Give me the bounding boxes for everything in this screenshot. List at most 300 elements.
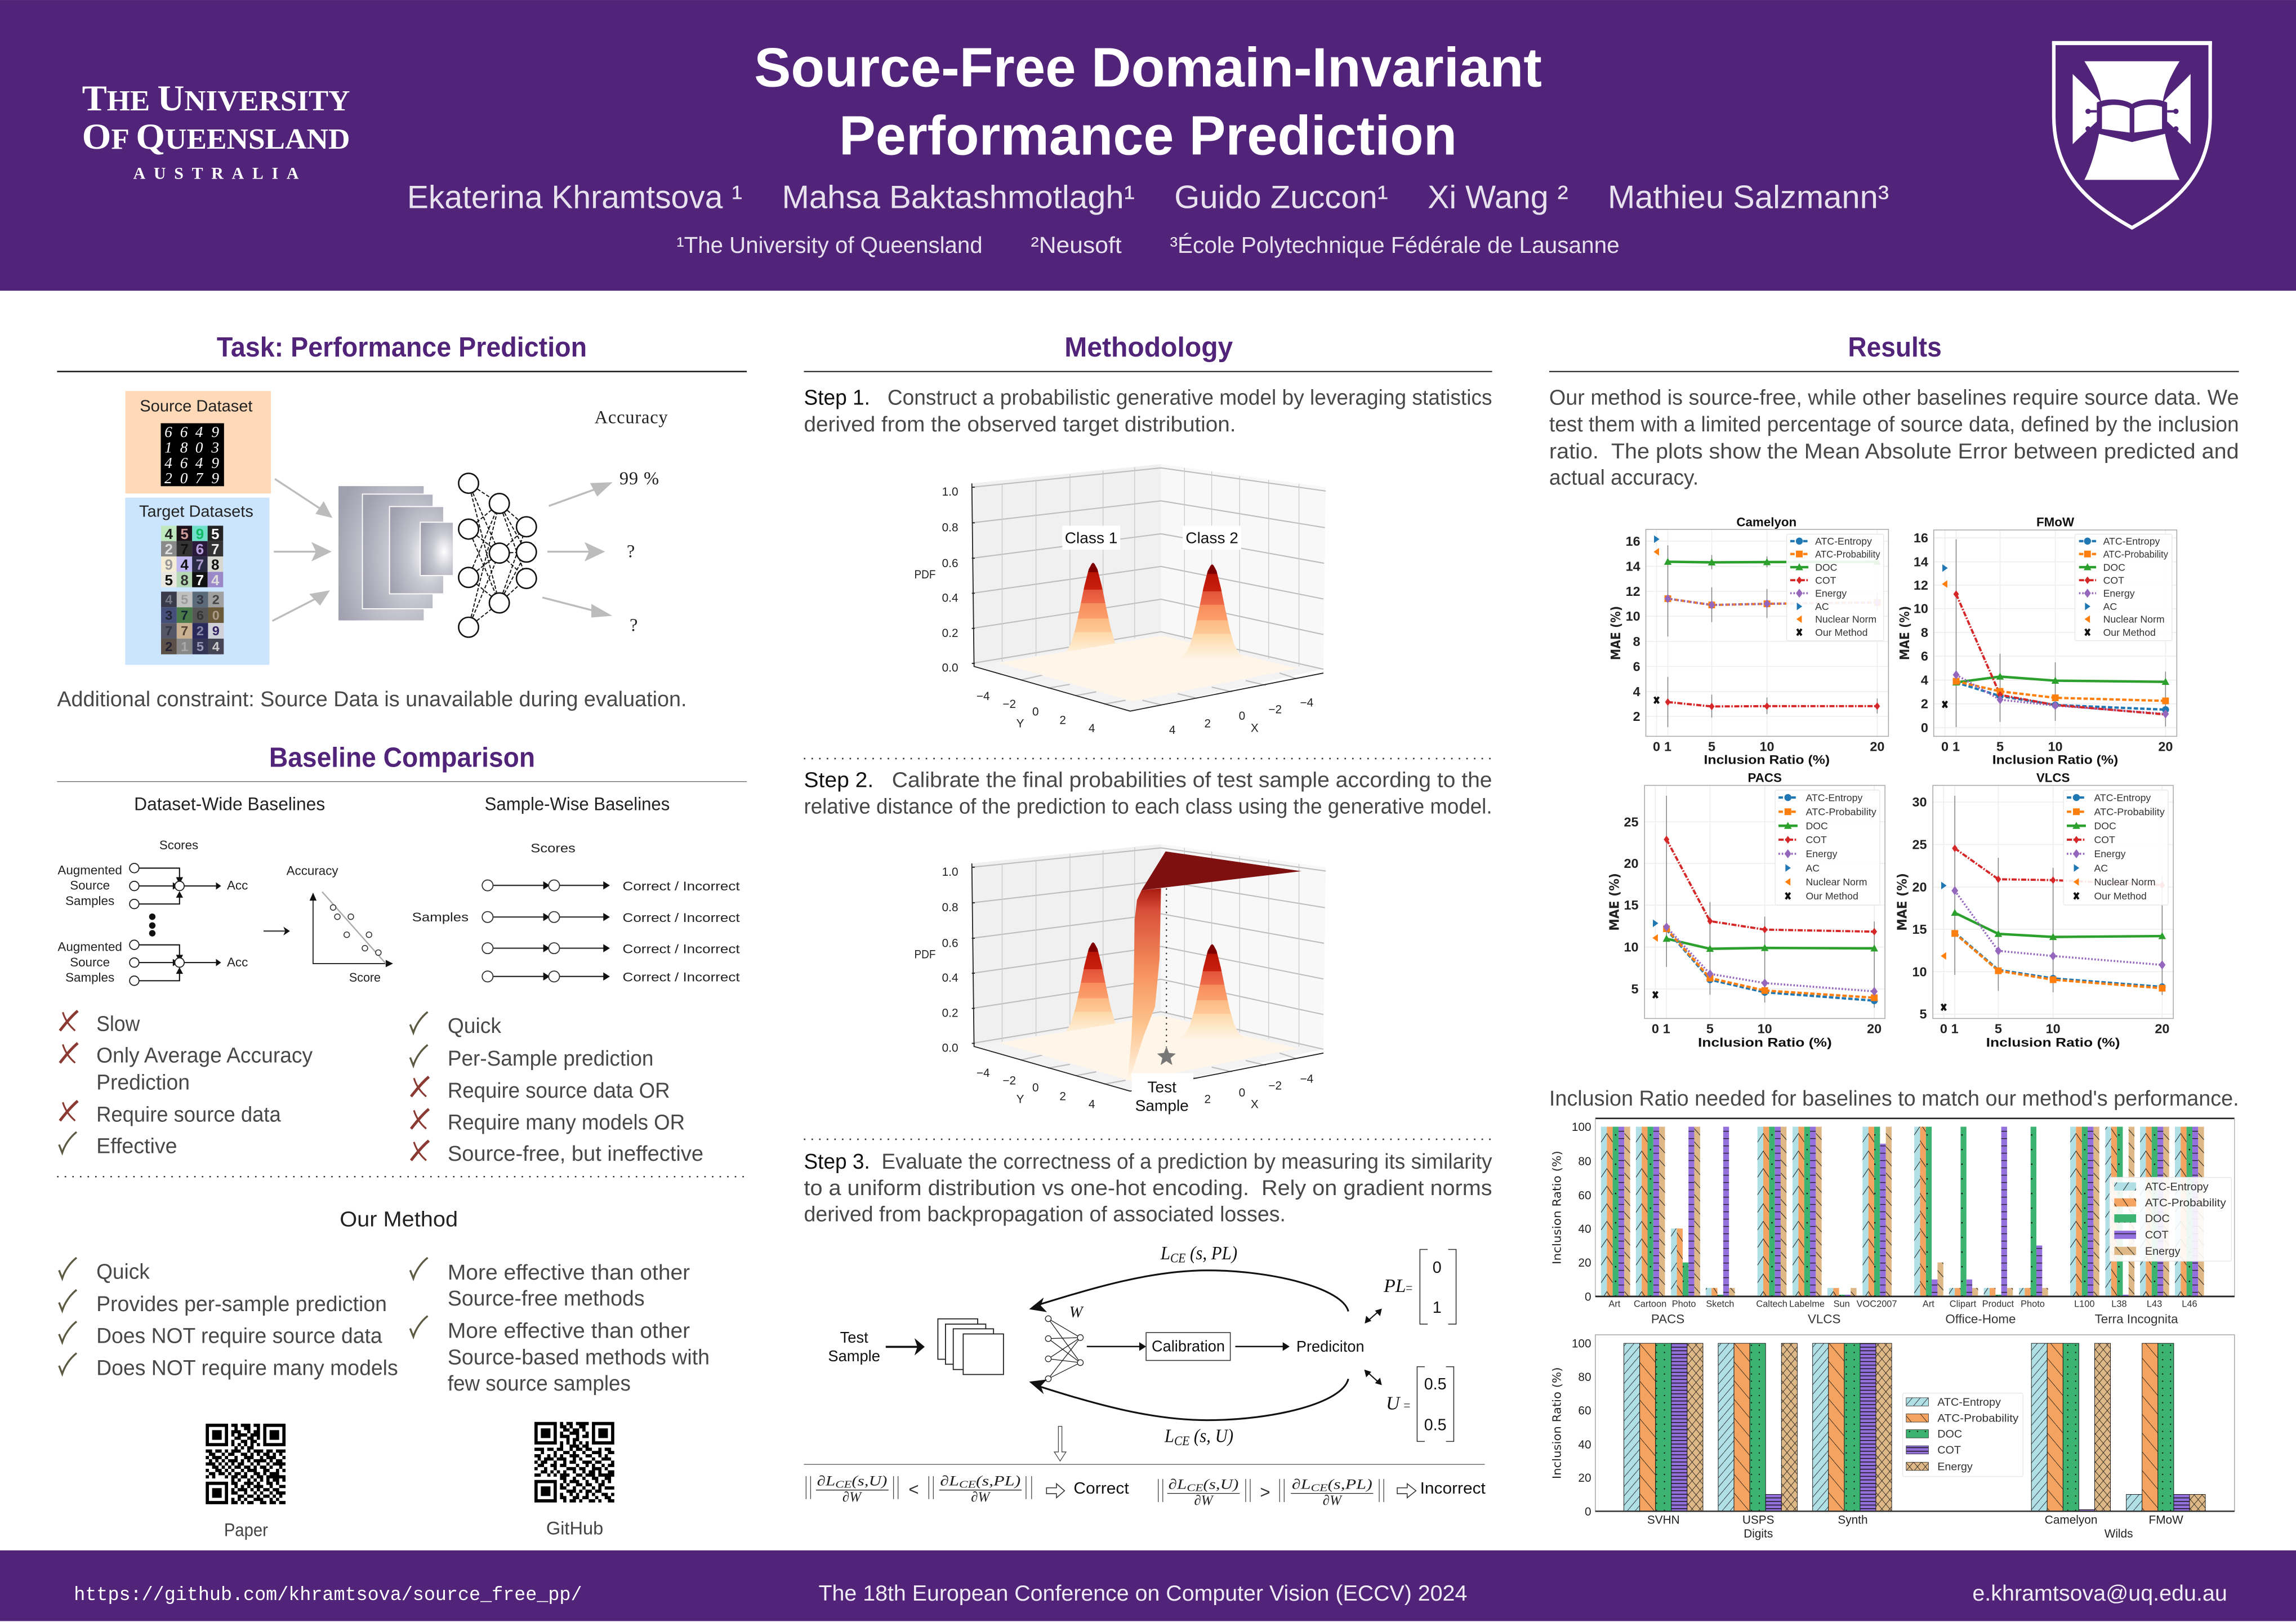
text: results description xyxy=(1549,386,2239,490)
chart: 3D PDF with test sample spike: Test xyxy=(1147,1079,1176,1096)
formula: incorrect condition: (s,PL) xyxy=(1327,1477,1372,1492)
target datasets box: 6 xyxy=(196,541,204,558)
legend: VLCS: COT xyxy=(2094,834,2115,845)
logo: The University of Queensland wordmark: OF QUEENSLAND xyxy=(82,117,350,157)
header band xyxy=(0,0,2296,291)
chart: inclusion ratio bars, domain datasets: Caltech xyxy=(1756,1299,1787,1309)
formula: correct condition: (s,PL) xyxy=(976,1473,1020,1489)
arrows: inputs to network xyxy=(273,479,331,621)
logo: The University of Queensland wordmark xyxy=(82,78,350,182)
formula: correct condition: ∂W xyxy=(842,1490,862,1505)
source dataset box: 4 xyxy=(164,454,172,471)
formula: incorrect condition: ∂L xyxy=(1169,1477,1183,1492)
diagram: calibration pipeline: 1 xyxy=(1433,1299,1442,1317)
neural network xyxy=(458,473,536,637)
QR code: GitHub xyxy=(534,1422,614,1503)
chart: 3D PDF with test sample spike: 0.0 xyxy=(942,1041,958,1054)
target datasets box: 7 xyxy=(196,556,204,573)
label: paper: Paper xyxy=(224,1520,268,1540)
chart: inclusion ratio bars, digits and wilds: 60 xyxy=(1578,1405,1591,1418)
legend: PACS: AC xyxy=(1805,862,1820,874)
chart: Camelyon line plot: 20 xyxy=(1870,739,1884,754)
diagram: calibration pipeline: L xyxy=(1161,1243,1171,1264)
icon: UQ shield crest xyxy=(2052,41,2212,228)
chart: inclusion ratio bars, domain datasets: L100 xyxy=(2074,1299,2095,1309)
target datasets box: 7 xyxy=(165,623,172,638)
legend: VLCS: AC xyxy=(2094,862,2108,874)
legend: FMoW: ATC-Entropy xyxy=(2103,536,2160,547)
text: step 1 xyxy=(804,386,1492,436)
text: results description: Our method is source-free, while other baselines require source data. We xyxy=(1549,386,2239,409)
authors: Guido Zuccon¹ xyxy=(1174,179,1388,215)
text: inclusion ratio caption: Inclusion Ratio needed for baselines to match our method's performance. xyxy=(1549,1087,2239,1111)
target datasets box: 6 xyxy=(197,608,204,622)
footer: email: e.khramtsova@uq.edu.au xyxy=(1972,1581,2227,1606)
diagram: calibration pipeline: = xyxy=(1403,1400,1410,1412)
target datasets box: 2 xyxy=(197,623,204,638)
text: step 3: Step 3. Evaluate the correctness of a prediction by measuring its similarity xyxy=(804,1150,1492,1174)
text: step 2 xyxy=(804,769,1492,818)
affiliations: ¹The University of Queensland xyxy=(676,232,983,258)
chart: 3D PDF with test sample spike: 2 xyxy=(1205,1093,1211,1106)
chart: FMoW line plot: 10 xyxy=(1914,601,1928,616)
chart: 3D PDF with two classes: Class 2 xyxy=(1185,529,1238,546)
source dataset box: 9 xyxy=(211,424,219,440)
chart: inclusion ratio bars, domain datasets: Art xyxy=(1923,1299,1934,1309)
formula: correct condition: ∂W xyxy=(971,1490,991,1505)
chart: 3D PDF with test sample spike: 0.6 xyxy=(942,937,958,950)
chart: inclusion ratio bars, domain datasets: Product xyxy=(1982,1299,2014,1309)
output labels: Accuracy xyxy=(595,407,668,427)
legend: Camelyon: COT xyxy=(1815,574,1836,586)
diagram: sample-wise baselines xyxy=(412,841,740,984)
diagram: calibration pipeline: CE xyxy=(1174,1434,1189,1449)
chart: inclusion ratio bars, domain datasets: Sun xyxy=(1834,1299,1850,1309)
chart: PACS line plot: 10 xyxy=(1758,1022,1772,1036)
legend: PACS xyxy=(1775,790,1880,905)
panel: results xyxy=(1549,332,2239,1540)
formula: incorrect condition: Incorrect xyxy=(1420,1480,1486,1498)
chart: inclusion ratio bars, domain datasets: 100 xyxy=(1572,1121,1591,1134)
panel: methodology xyxy=(804,332,1492,1508)
diagram: dataset-wide baselines: Augmented xyxy=(57,863,122,877)
diagram: sample-wise baselines: Scores xyxy=(530,841,576,855)
formula: correct condition: CE xyxy=(835,1479,851,1490)
source dataset box: 4 xyxy=(195,424,203,440)
chart: inclusion ratio bars, digits and wilds: Digits xyxy=(1744,1527,1773,1540)
chart: Camelyon line plot: 5 xyxy=(1708,739,1715,754)
chart: 3D PDF with test sample spike: Y xyxy=(1017,1093,1024,1106)
text: step 2: Step 2. Calibrate the final probabilities of test sample according to the xyxy=(804,769,1492,792)
target datasets box: 3 xyxy=(197,592,204,607)
chart: 3D PDF with test sample spike: 0 xyxy=(1032,1081,1039,1094)
chart: inclusion ratio bars, domain datasets: Labelme xyxy=(1789,1299,1825,1309)
diagram: calibration pipeline: Calibration xyxy=(1152,1337,1225,1354)
chart: 3D PDF with two classes: −4 xyxy=(1300,697,1313,710)
chart: PACS line plot: 0 xyxy=(1652,1022,1659,1036)
source dataset box: 2 xyxy=(164,470,172,487)
chart: 3D PDF with two classes: Y xyxy=(1017,717,1024,730)
legend: FMoW: Nuclear Norm xyxy=(2103,614,2165,625)
chart: FMoW line plot: 8 xyxy=(1921,625,1928,640)
affiliations: ³École Polytechnique Fédérale de Lausanne xyxy=(1170,232,1620,258)
source dataset box: 3 xyxy=(211,439,219,456)
chart: 3D PDF with test sample spike: PDF xyxy=(915,948,935,961)
list: dataset-wide pros and cons: Require source data xyxy=(96,1103,282,1126)
output labels: ? xyxy=(630,616,637,636)
diagram: calibration pipeline: U xyxy=(1386,1393,1401,1414)
arrows: outputs xyxy=(542,483,610,617)
chart: VLCS line plot: 10 xyxy=(2046,1022,2061,1036)
chart: VLCS line plot: 20 xyxy=(2155,1022,2169,1036)
legend: VLCS: Our Method xyxy=(2094,890,2147,902)
formula: incorrect condition: ∂W xyxy=(1194,1493,1214,1508)
chart: VLCS line plot: 1 xyxy=(1951,1022,1959,1036)
list: our method left: Does NOT require source data xyxy=(96,1324,382,1348)
chart: FMoW line plot: 4 xyxy=(1921,673,1928,688)
chart: FMoW line plot: 0 xyxy=(1921,720,1928,735)
legend: Camelyon: Energy xyxy=(1815,588,1847,599)
list: our method right: Source-free methods xyxy=(448,1287,645,1311)
chart: Camelyon line plot: MAE (%) xyxy=(1609,606,1624,660)
chart: VLCS line plot: 20 xyxy=(1912,880,1927,894)
list: sample-wise pros and cons: Require many models OR xyxy=(448,1111,685,1135)
chart: Camelyon line plot: 1 xyxy=(1664,739,1671,754)
chart: PACS line plot: 10 xyxy=(1624,940,1639,955)
footer: conference: The 18th European Conference on Computer Vision (ECCV) 2024 xyxy=(818,1581,1467,1606)
bars: VLCS sun and VOC2007 xyxy=(1827,1127,1892,1296)
diagram: calibration pipeline: (s, U) xyxy=(1189,1426,1233,1447)
diagram: calibration pipeline: 0.5 xyxy=(1424,1416,1447,1434)
heading: methodology: Methodology xyxy=(1064,332,1233,363)
chart: VLCS line plot: 25 xyxy=(1912,837,1927,852)
legend: bars digits and wilds: ATC-Probability xyxy=(1937,1412,2018,1425)
formula: incorrect condition: > xyxy=(1260,1482,1270,1502)
chart: inclusion ratio bars, domain datasets: L43 xyxy=(2147,1299,2162,1309)
chart: 3D PDF with two classes: −4 xyxy=(977,690,990,703)
chart: inclusion ratio bars, domain datasets: Photo xyxy=(1672,1299,1696,1309)
target datasets box: 5 xyxy=(180,525,189,542)
chart: inclusion ratio bars, digits and wilds: 80 xyxy=(1578,1371,1591,1384)
formula: incorrect condition: (s,U) xyxy=(1203,1477,1238,1492)
legend: FMoW: DOC xyxy=(2103,562,2125,573)
chart: Camelyon line plot: 16 xyxy=(1626,534,1640,549)
text: step 1: derived from the observed target distribution. xyxy=(804,413,1236,436)
legend: FMoW: Our Method xyxy=(2103,627,2156,638)
chart: Camelyon line plot: 10 xyxy=(1760,739,1775,754)
diagram: sample-wise baselines: Correct / Incorrect xyxy=(623,970,740,984)
legend: bars domain datasets: COT xyxy=(2145,1229,2169,1241)
chart: inclusion ratio bars, domain datasets: L46 xyxy=(2182,1299,2197,1309)
target datasets box: 7 xyxy=(211,541,219,558)
list: our method left: Provides per-sample prediction xyxy=(96,1293,387,1316)
diagram: dataset-wide baselines: Samples xyxy=(65,970,114,984)
authors: Mahsa Baktashmotlagh¹ xyxy=(782,179,1135,215)
chart: inclusion ratio bars, digits and wilds: SVHN xyxy=(1647,1514,1680,1527)
text: step 3: to a uniform distribution vs one-hot encoding. Rely on gradient norms xyxy=(804,1177,1492,1200)
chart: inclusion ratio bars, digits and wilds: 100 xyxy=(1572,1338,1591,1351)
legend: Camelyon: ATC-Entropy xyxy=(1815,536,1872,547)
chart: VLCS line plot: 5 xyxy=(1995,1022,2002,1036)
bars: Terra Incognita L38 xyxy=(2105,1127,2134,1296)
chart: FMoW line plot: FMoW xyxy=(2036,515,2075,529)
target datasets box: 7 xyxy=(181,608,188,622)
target datasets box: 9 xyxy=(196,525,204,542)
chart: 3D PDF with test sample spike: 0 xyxy=(1239,1086,1245,1099)
diagram: dataset-wide baselines: Acc xyxy=(227,879,248,893)
target datasets box: 8 xyxy=(211,556,219,573)
output labels: 99 % xyxy=(619,469,659,489)
chart: 3D PDF with two classes: 0.6 xyxy=(942,557,958,570)
list: dataset-wide pros and cons: Only Average Accuracy xyxy=(96,1044,313,1068)
source dataset box: 0 xyxy=(180,470,188,487)
chart: 3D PDF with two classes: Class 1 xyxy=(1065,529,1117,546)
target datasets box: 2 xyxy=(212,592,220,607)
bars: digits xyxy=(1624,1343,1892,1511)
source dataset box xyxy=(126,391,271,493)
chart: inclusion ratio bars, domain datasets: 80 xyxy=(1578,1155,1591,1168)
target datasets box: 7 xyxy=(181,623,188,638)
legend: FMoW: ATC-Probability xyxy=(2103,549,2168,560)
text: step 2: relative distance of the prediction to each class using the generative model. xyxy=(804,795,1492,818)
legend: FMoW: COT xyxy=(2103,574,2124,586)
source dataset box: 7 xyxy=(195,470,204,487)
chart: FMoW line plot xyxy=(1898,515,2177,767)
chart: inclusion ratio bars, domain datasets: VOC2007 xyxy=(1857,1299,1897,1309)
panel: our method xyxy=(59,1207,710,1540)
chart: PACS line plot: 1 xyxy=(1663,1022,1670,1036)
chart: VLCS line plot: 5 xyxy=(1919,1007,1927,1022)
target datasets box: 0 xyxy=(212,608,220,622)
list: sample-wise pros and cons: Per-Sample prediction xyxy=(448,1047,653,1071)
chart: 3D PDF with two classes: 0 xyxy=(1239,710,1245,723)
diagram: calibration pipeline: 0.5 xyxy=(1424,1375,1447,1393)
chart: 3D PDF with two classes: 4 xyxy=(1169,724,1175,737)
diagram: dataset-wide baselines: Accuracy xyxy=(287,864,338,878)
chart: PACS line plot: 20 xyxy=(1624,856,1639,871)
target datasets box: 7 xyxy=(196,572,204,589)
target datasets box: 9 xyxy=(165,556,173,573)
chart: 3D PDF with test sample spike: X xyxy=(1251,1098,1259,1111)
chart: FMoW line plot: 2 xyxy=(1921,697,1928,711)
logo: The University of Queensland wordmark: THE UNIVERSITY xyxy=(82,78,350,119)
legend: bars digits and wilds: COT xyxy=(1937,1444,1961,1456)
target datasets box: 2 xyxy=(165,639,172,654)
chart: FMoW line plot: 20 xyxy=(2158,739,2173,754)
legend: bars domain datasets: ATC-Entropy xyxy=(2145,1180,2209,1193)
list: sample-wise pros and cons: Quick xyxy=(448,1014,502,1038)
chart: FMoW line plot: 1 xyxy=(1952,739,1960,754)
list: dataset-wide pros and cons: Prediction xyxy=(96,1071,190,1094)
footer: repository link: https://github.com/khramtsova/source_free_pp/ xyxy=(74,1585,582,1606)
chart: inclusion ratio bars, domain datasets: L38 xyxy=(2111,1299,2127,1309)
list: sample-wise pros and cons: Require source data OR xyxy=(448,1079,670,1103)
chart: 3D PDF with two classes: −2 xyxy=(1268,703,1282,716)
chart: 3D PDF with test sample spike: 1.0 xyxy=(942,866,958,879)
list: our method left: Does NOT require many models xyxy=(96,1357,398,1380)
chart: 3D PDF with two classes: 0.8 xyxy=(942,521,958,534)
subheading: sample-wise: Sample-Wise Baselines xyxy=(485,794,670,814)
chart: FMoW line plot: 14 xyxy=(1914,555,1928,569)
text: additional constraint: Additional constraint: Source Data is unavailable during evaluation. xyxy=(57,688,686,711)
chart: inclusion ratio bars, domain datasets: PACS xyxy=(1651,1312,1684,1326)
chart: 3D PDF with test sample spike: 0.8 xyxy=(942,901,958,914)
source dataset box: 0 xyxy=(195,439,203,456)
chart: 3D PDF with test sample spike: −2 xyxy=(1002,1074,1016,1087)
footer band xyxy=(0,1550,2296,1621)
target datasets box: 5 xyxy=(181,592,188,607)
chart: 3D PDF with test sample spike xyxy=(915,844,1326,1115)
diagram: calibration pipeline: CE xyxy=(1170,1251,1185,1265)
panel: baseline comparison xyxy=(57,742,747,1177)
formula: correct condition: ∂L xyxy=(817,1473,832,1489)
legend: Camelyon: AC xyxy=(1815,601,1829,612)
chart: 3D PDF with two classes: 4 xyxy=(1089,722,1095,735)
chart: Camelyon line plot: 6 xyxy=(1633,659,1640,674)
bars: wilds xyxy=(2031,1343,2205,1511)
formula: correct condition: CE xyxy=(959,1479,976,1490)
source dataset box: 9 xyxy=(211,470,219,487)
legend: VLCS: DOC xyxy=(2094,821,2116,832)
logo: The University of Queensland wordmark: AUSTRALIA xyxy=(133,164,299,182)
diagram: dataset-wide baselines: Scores xyxy=(159,838,198,852)
target datasets box: 8 xyxy=(180,572,189,589)
chart: PACS line plot: 5 xyxy=(1631,982,1639,996)
list: our method left: Quick xyxy=(96,1260,150,1284)
formula: incorrect condition: CE xyxy=(1187,1482,1203,1493)
diagram: calibration pipeline: (s, PL) xyxy=(1185,1243,1237,1264)
text: results description: ratio. The plots show the Mean Absolute Error between predicted and xyxy=(1549,440,2239,464)
legend: VLCS: Nuclear Norm xyxy=(2094,876,2155,888)
chart: VLCS line plot: 10 xyxy=(1912,964,1927,979)
legend: PACS: DOC xyxy=(1805,821,1828,832)
chart: PACS line plot: 25 xyxy=(1624,814,1639,829)
chart: Camelyon line plot: 8 xyxy=(1633,634,1640,649)
source dataset box: 6 xyxy=(180,454,188,471)
list: our method right: More effective than other xyxy=(448,1319,690,1343)
legend: VLCS xyxy=(2063,790,2168,905)
legend: Camelyon: Our Method xyxy=(1815,627,1867,638)
source dataset box: 6 xyxy=(164,424,172,440)
chart: Camelyon line plot: 2 xyxy=(1633,709,1640,724)
diagram: dataset-wide baselines xyxy=(57,838,393,986)
target datasets box: 4 xyxy=(211,572,220,589)
chart: FMoW line plot: 5 xyxy=(1996,739,2004,754)
diagram: dataset-wide baselines: Source xyxy=(70,955,110,969)
legend: PACS: ATC-Probability xyxy=(1805,806,1876,818)
output labels: ? xyxy=(627,541,635,562)
target datasets box: 4 xyxy=(165,592,172,607)
source dataset box: 1 xyxy=(164,439,172,456)
chart: PACS line plot: 5 xyxy=(1706,1022,1714,1036)
chart: PACS line plot: Inclusion Ratio (%) xyxy=(1698,1036,1832,1050)
chart: VLCS line plot: 15 xyxy=(1912,922,1927,937)
diagram: sample-wise baselines: Samples xyxy=(412,910,469,924)
diagram: calibration pipeline: Test xyxy=(840,1329,868,1346)
text: results description: actual accuracy. xyxy=(1549,466,1698,490)
legend: PACS: ATC-Entropy xyxy=(1805,792,1862,803)
legend: bars digits and wilds: DOC xyxy=(1937,1428,1962,1441)
chart: 3D PDF with test sample spike: Sample xyxy=(1135,1097,1189,1115)
formula: incorrect condition xyxy=(1158,1477,1486,1508)
legend: Camelyon xyxy=(1787,534,1884,641)
diagram: calibration pipeline: Sample xyxy=(828,1347,880,1365)
source dataset box: 6 xyxy=(180,424,188,440)
heading: results: Results xyxy=(1848,332,1942,363)
diagram: dataset-wide baselines: Samples xyxy=(65,894,114,908)
diagram: calibration pipeline: Prediciton xyxy=(1296,1338,1365,1355)
legend: FMoW xyxy=(2075,534,2172,641)
chart: 3D PDF with two classes: 1.0 xyxy=(942,485,958,498)
legend: Camelyon: ATC-Probability xyxy=(1815,549,1880,560)
chart: inclusion ratio bars, domain datasets: 60 xyxy=(1578,1189,1591,1202)
text: step 3 xyxy=(804,1150,1492,1227)
chart: PACS line plot: PACS xyxy=(1747,771,1782,785)
legend: PACS: Our Method xyxy=(1805,890,1858,902)
chart: inclusion ratio bars, domain datasets: 40 xyxy=(1578,1223,1591,1236)
target datasets box: 4 xyxy=(165,525,173,542)
legend: bars domain datasets xyxy=(2110,1178,2231,1261)
chart: inclusion ratio bars, digits and wilds xyxy=(1550,1335,2235,1540)
legend: PACS: Energy xyxy=(1805,848,1838,859)
chart: FMoW line plot: 16 xyxy=(1914,531,1928,545)
source dataset box: 9 xyxy=(211,454,219,471)
target datasets box: 3 xyxy=(165,608,172,622)
diagram: dataset-wide baselines: Acc xyxy=(227,955,248,969)
chart: 3D PDF with test sample spike: −2 xyxy=(1268,1080,1282,1093)
chart: Camelyon line plot: 14 xyxy=(1626,559,1640,574)
chart: PACS line plot: 15 xyxy=(1624,898,1639,912)
formula: correct condition: Correct xyxy=(1073,1480,1129,1498)
formula: correct condition: ∂L xyxy=(940,1473,955,1489)
authors: Mathieu Salzmann³ xyxy=(1608,179,1889,215)
chart: inclusion ratio bars, digits and wilds: 0 xyxy=(1585,1505,1591,1518)
legend: bars digits and wilds: Energy xyxy=(1937,1460,1973,1473)
diagram: sample-wise baselines: Correct / Incorrect xyxy=(623,942,740,956)
diagram: calibration pipeline: 0 xyxy=(1433,1259,1442,1277)
heading: task: Task: Performance Prediction xyxy=(217,332,587,363)
title: Source-Free Domain-Invariant xyxy=(754,36,1542,98)
list: our method right: few source samples xyxy=(448,1372,631,1396)
chart: 3D PDF with two classes: 0.4 xyxy=(942,591,958,604)
chart: inclusion ratio bars, domain datasets: Art xyxy=(1608,1299,1621,1309)
chart: inclusion ratio bars, domain datasets: Office-Home xyxy=(1945,1312,2016,1326)
chart: inclusion ratio bars, domain datasets: VLCS xyxy=(1808,1312,1840,1326)
legend: bars domain datasets: DOC xyxy=(2145,1213,2170,1225)
list: our method left xyxy=(59,1258,398,1380)
formula: incorrect condition: ∂W xyxy=(1323,1493,1343,1508)
target datasets box: 7 xyxy=(180,541,189,558)
formula: correct condition: (s,U) xyxy=(851,1473,887,1489)
formula: correct condition: < xyxy=(908,1480,919,1499)
source dataset box: 4 xyxy=(195,454,203,471)
chart: Camelyon line plot: Inclusion Ratio (%) xyxy=(1704,752,1830,767)
chart: PACS line plot xyxy=(1608,771,1885,1050)
chart: inclusion ratio bars, domain datasets: 0 xyxy=(1585,1290,1591,1303)
chart: Camelyon line plot: 4 xyxy=(1633,684,1640,699)
legend: VLCS: Energy xyxy=(2094,848,2126,859)
authors: Xi Wang ² xyxy=(1428,179,1568,215)
chart: 3D PDF with test sample spike: 0.2 xyxy=(942,1007,958,1020)
legend: VLCS: ATC-Probability xyxy=(2094,806,2165,818)
bars: Office-Home xyxy=(1914,1127,2048,1296)
chart: FMoW line plot: Inclusion Ratio (%) xyxy=(1992,752,2118,767)
list: sample-wise pros and cons xyxy=(410,1012,703,1166)
chart: VLCS line plot: 0 xyxy=(1940,1022,1947,1036)
authors xyxy=(407,179,1889,215)
legend: FMoW: AC xyxy=(2103,601,2117,612)
chart: inclusion ratio bars, domain datasets: Sketch xyxy=(1706,1299,1734,1309)
